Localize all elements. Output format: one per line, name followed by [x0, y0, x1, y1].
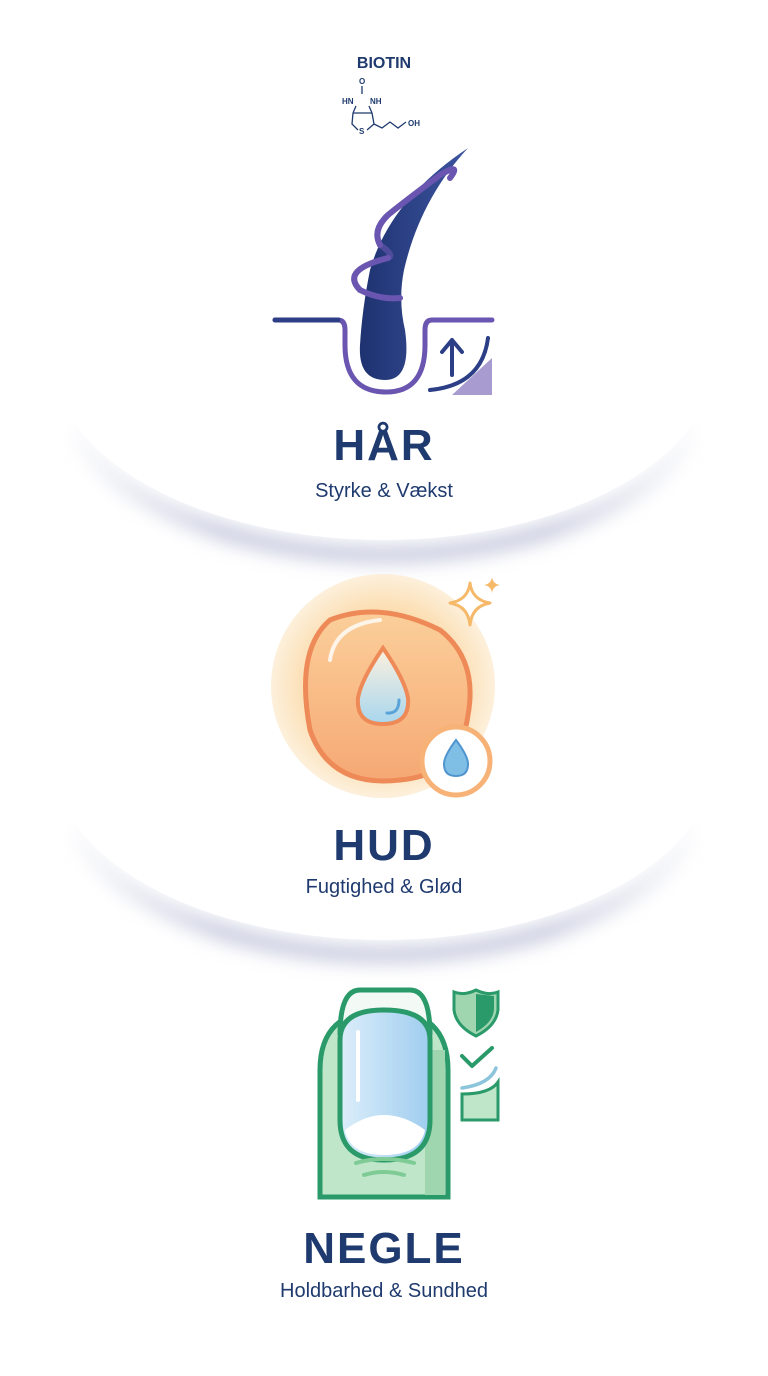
icon: fingernail — [320, 990, 498, 1197]
icon: biotin molecule: S — [359, 127, 365, 136]
subtitle: Fugtighed & Glød: Fugtighed & Glød — [306, 876, 462, 898]
icon: biotin molecule: OH — [408, 119, 420, 128]
icon: hair follicle — [275, 148, 492, 395]
subtitle: Holdbarhed & Sundhed: Holdbarhed & Sundhed — [280, 1280, 488, 1302]
section separator curves — [94, 458, 674, 972]
icon: skin cell — [271, 574, 500, 798]
heading: HUD: HUD — [333, 821, 435, 870]
icon: biotin molecule: O — [359, 77, 365, 86]
heading: HÅR: HÅR — [333, 421, 435, 470]
icon: biotin molecule: HN — [342, 97, 354, 106]
subtitle: Styrke & Vækst: Styrke & Vækst — [315, 480, 453, 502]
icon: biotin molecule — [342, 77, 420, 136]
heading: BIOTIN: BIOTIN — [357, 55, 411, 72]
heading: NEGLE: NEGLE — [303, 1224, 465, 1273]
icon: biotin molecule: NH — [370, 97, 382, 106]
